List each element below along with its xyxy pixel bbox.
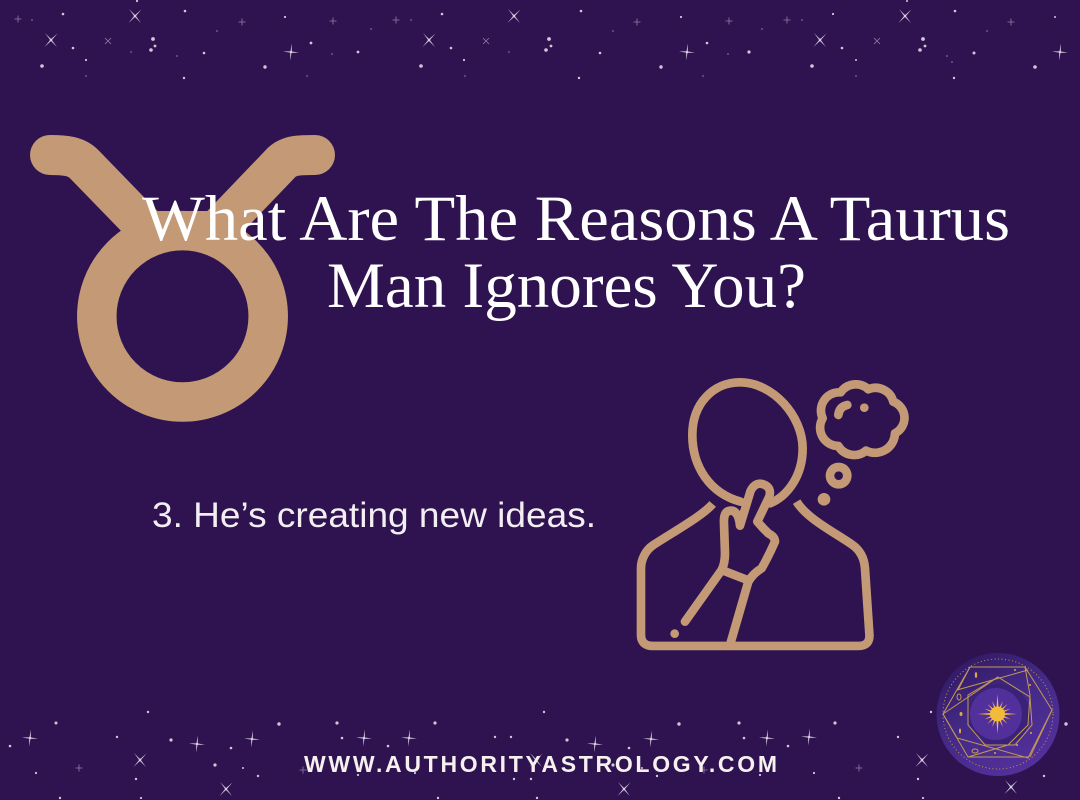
icon: thinking man: [641, 382, 904, 646]
head outline: [692, 382, 803, 503]
shoulders and torso: [641, 502, 869, 646]
cloud highlight: [838, 405, 847, 415]
thought cloud: [820, 384, 904, 455]
title: Man Ignores You?: [327, 250, 806, 322]
thought bubble ring: [830, 467, 847, 484]
logo: astrology emblem: [936, 653, 1060, 776]
top star field: [14, 0, 1068, 79]
logo centre: [970, 688, 1022, 740]
logo gold geometry: [943, 659, 1053, 769]
thought bubble small dot: [818, 493, 830, 506]
cloud dot: [860, 403, 869, 412]
logo sun: [978, 694, 1018, 734]
logo disc: [936, 653, 1060, 776]
arm: [685, 570, 748, 645]
reason text: 3. He’s creating new ideas.: [152, 496, 596, 535]
title: What Are The Reasons A Taurus: [142, 183, 1010, 255]
hand with pointing finger: [722, 484, 775, 581]
title: [142, 183, 1010, 322]
bottom star field: [9, 711, 1068, 799]
icon: Taurus zodiac symbol: [50, 155, 315, 402]
logo inner ring: [968, 684, 1030, 746]
shirt dot: [670, 629, 679, 638]
logo gold ornaments: [957, 669, 1032, 754]
website url: WWW.AUTHORITYASTROLOGY.COM: [304, 751, 777, 777]
